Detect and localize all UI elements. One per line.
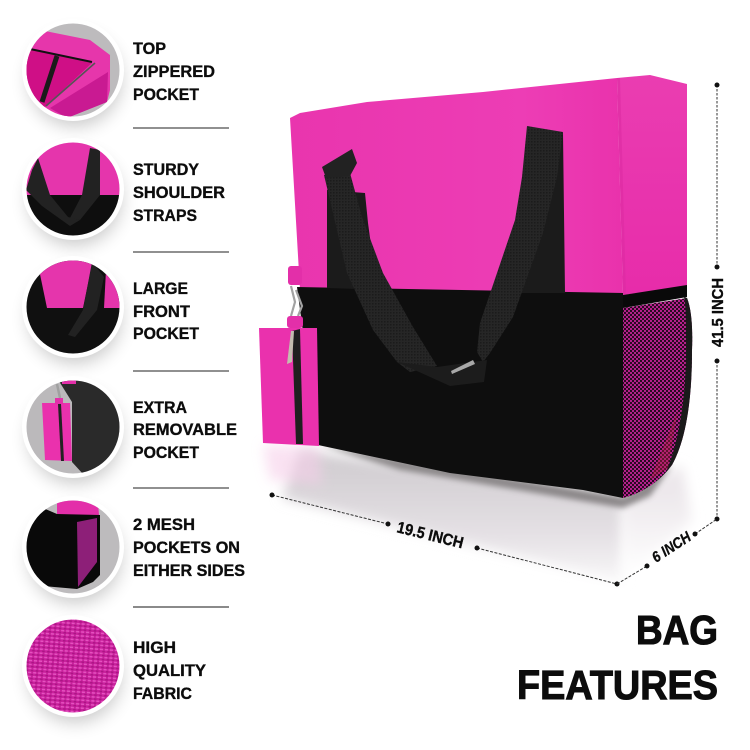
feature 4: extra removable pocket: POCKET [133, 443, 200, 462]
handle buckle [397, 360, 487, 386]
feature 6: high quality fabric: FABRIC [133, 684, 192, 703]
feature 1: top zippered pocket [20, 19, 215, 126]
back handle panels [510, 133, 565, 293]
feature 2: sturdy shoulder straps: STRAPS [133, 206, 197, 225]
label: EXTRA [133, 398, 187, 417]
circle photo: fabric [22, 615, 124, 722]
label: 2 MESH [133, 515, 195, 534]
feature 4: extra removable pocket: REMOVABLE [133, 420, 237, 439]
title: FEATURES [517, 662, 718, 708]
title: BAG [636, 607, 718, 653]
handle top loop [322, 149, 357, 178]
dimension: depth [617, 519, 717, 584]
feature 3: large front pocket: POCKET [133, 324, 200, 343]
bag side mesh pocket [623, 298, 692, 498]
feature 1: top zippered pocket: POCKET [133, 85, 200, 104]
feature 3: large front pocket: FRONT [133, 302, 191, 321]
dimension: width: 19.5 INCH [395, 519, 465, 552]
circle photo: straps [20, 138, 130, 245]
title [517, 607, 718, 708]
floor shadow under bag [263, 445, 692, 582]
front handle strap right [477, 126, 563, 362]
dimension: width [270, 492, 620, 586]
label: LARGE [133, 279, 188, 298]
feature 5: mesh pockets [20, 495, 245, 603]
label: HIGH [133, 638, 176, 657]
bag side black band [623, 285, 687, 308]
bag pink upper front [290, 78, 623, 295]
label: TOP [133, 39, 166, 58]
circle photo: zipper [20, 19, 130, 126]
feature 2: sturdy shoulder straps: SHOULDER [133, 183, 225, 202]
dimension: height: 41.5 INCH [710, 278, 727, 347]
dimension: depth: 6 INCH [649, 528, 695, 566]
front handle strap left [324, 173, 437, 372]
label: STURDY [133, 160, 200, 179]
feature 6: high quality fabric: QUALITY [133, 661, 207, 680]
circle photo: front pocket [20, 255, 130, 363]
feature 5: mesh pockets: EITHER SIDES [133, 561, 245, 580]
feature 3: large front pocket [20, 255, 200, 363]
bag black lower front [297, 287, 623, 498]
feature 4: extra removable pocket [20, 375, 237, 483]
removable pouch [259, 328, 319, 446]
product photo: tote bag [259, 75, 692, 498]
circle photo: mesh [20, 495, 130, 603]
dimension: height [710, 82, 727, 522]
removable pouch clip [287, 266, 303, 328]
feature 1: top zippered pocket: ZIPPERED [133, 62, 215, 81]
feature 6: high quality fabric [22, 615, 207, 722]
bag pink upper side [617, 75, 687, 295]
feature 5: mesh pockets: POCKETS ON [133, 538, 240, 557]
feature 2: sturdy shoulder straps [20, 138, 225, 245]
circle photo: pouch [20, 375, 130, 483]
